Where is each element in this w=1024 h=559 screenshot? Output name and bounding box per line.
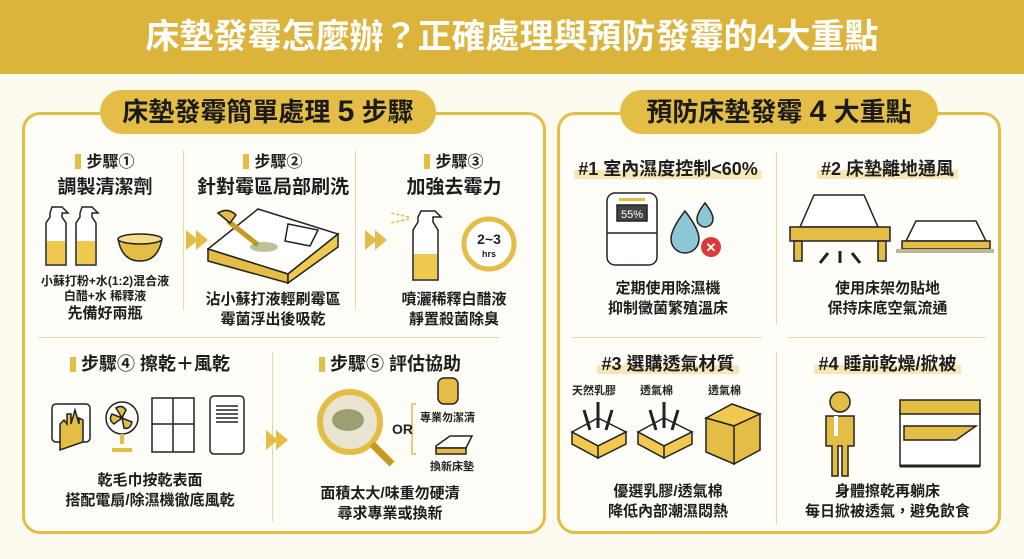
heading: prevention: 預防床墊發霉 4 大重點 xyxy=(646,95,912,128)
step 1: 白醋+水 稀釋液 xyxy=(64,289,146,303)
icon: bottles and bowl xyxy=(45,206,163,266)
point 2 xyxy=(789,159,994,317)
title bar: 床墊發霉怎麼辦？正確處理與預防發霉的4大重點 xyxy=(146,18,878,56)
icon: materials: 天然乳膠 xyxy=(572,383,616,397)
arrow 1 xyxy=(186,230,208,250)
step 5: 步驟⑤ 評估協助 xyxy=(330,354,461,374)
point 2: 保持床底空氣流通 xyxy=(827,300,948,317)
icon: mattress brushing xyxy=(206,208,340,284)
icon: bed frame vs floor mattress xyxy=(789,194,994,264)
icon: magnifier with options: 專業勿潔清 xyxy=(420,410,475,424)
step 4: 乾毛巾按乾表面 xyxy=(97,472,202,489)
step 3 xyxy=(391,153,516,328)
arrow 3 xyxy=(266,430,288,450)
step 1: 小蘇打粉+水(1:2)混合液 xyxy=(41,274,169,288)
icon: dehumidifier and drops xyxy=(606,192,721,266)
arrow 2 xyxy=(365,230,387,250)
step 3: 噴灑稀釋白醋液 xyxy=(401,291,506,308)
icon: materials: 透氣棉 xyxy=(640,383,673,397)
step 1: 先備好兩瓶 xyxy=(67,305,142,322)
icon: materials: 透氣棉 xyxy=(708,383,741,397)
point 2: #2 床墊離地通風 xyxy=(821,159,954,179)
icon: spray and timer: hrs xyxy=(482,249,496,259)
icon: materials xyxy=(570,383,762,466)
step 2: 針對霉區局部刷洗 xyxy=(197,177,349,198)
icon: magnifier with options xyxy=(317,377,475,473)
point 4: 每日掀被透氣，避免飲食 xyxy=(805,503,970,520)
point 1: 抑制黴菌繁殖溫床 xyxy=(608,300,728,317)
step 3: 步驟③ xyxy=(435,154,484,171)
step 3: 加強去霉力 xyxy=(406,177,502,198)
step 1: 步驟① xyxy=(86,154,134,171)
step 1 xyxy=(41,153,169,322)
point 4: #4 睡前乾燥/掀被 xyxy=(818,354,957,374)
step 1: 調製清潔劑 xyxy=(57,177,152,198)
point 3: 優選乳膠/透氣棉 xyxy=(613,483,723,500)
panel: 5 steps xyxy=(22,112,546,534)
heading: prevention xyxy=(620,90,938,134)
icon: spray and timer xyxy=(391,210,516,281)
text: 霉菌浮出後吸乾 xyxy=(220,311,326,328)
step 5: 面積太大/味重勿硬清 xyxy=(320,485,460,502)
icon: magnifier with options: 換新床墊 xyxy=(430,459,474,473)
icon: dehumidifier and drops: 55% xyxy=(621,209,643,221)
step 5: 尋求專業或換新 xyxy=(337,505,442,522)
point 1: #1 室內濕度控制<60% xyxy=(578,159,758,179)
icon: dehumidifier and drops: ✕ xyxy=(706,240,716,255)
icon: person drying and bed xyxy=(825,391,981,477)
point 4 xyxy=(805,354,981,520)
step 2: 沾小蘇打液輕刷霉區 xyxy=(205,291,340,308)
heading: 5 steps xyxy=(100,90,436,134)
step 4: 步驟④ 擦乾＋風乾 xyxy=(81,354,230,374)
icon: spray and timer: 2~3 xyxy=(477,231,501,247)
step 2 xyxy=(197,153,349,328)
point 3 xyxy=(570,354,762,520)
step 2: 步驟② xyxy=(254,154,302,171)
step 4 xyxy=(51,354,245,509)
point 2: 使用床架勿貼地 xyxy=(835,280,940,297)
icon: towel fan window dehumidifier xyxy=(51,395,245,455)
panel: prevention xyxy=(557,112,1001,534)
point 3: #3 選購透氣材質 xyxy=(601,354,735,374)
point 4: 身體擦乾再躺床 xyxy=(835,483,940,500)
title bar xyxy=(0,0,1024,74)
point 1: 定期使用除濕機 xyxy=(615,280,720,297)
text: 靜置殺菌除臭 xyxy=(409,311,499,328)
point 3: 降低內部潮濕悶熱 xyxy=(608,503,728,520)
step 5 xyxy=(317,354,475,522)
heading: 5 steps: 床墊發霉簡單處理 5 步驟 xyxy=(122,95,414,128)
point 1 xyxy=(574,159,762,317)
icon: magnifier with options: OR xyxy=(392,421,413,437)
step 4: 搭配電扇/除濕機徹底風乾 xyxy=(65,492,235,509)
